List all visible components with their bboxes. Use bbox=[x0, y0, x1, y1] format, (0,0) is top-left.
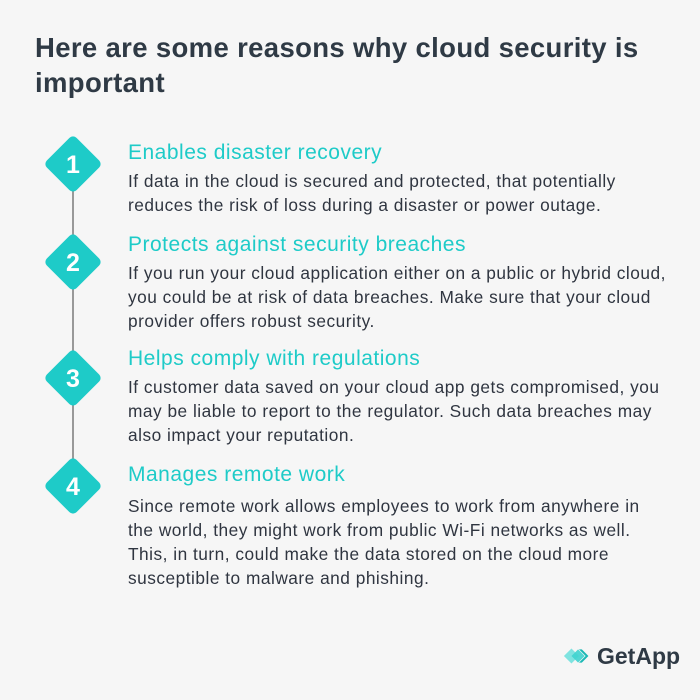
icon: diamond 1: 1 bbox=[66, 151, 80, 179]
section 2: provider offers robust security. bbox=[128, 311, 375, 331]
title bbox=[35, 32, 639, 98]
title: important bbox=[35, 67, 165, 98]
icon: diamond 4: 4 bbox=[66, 473, 80, 501]
section 3: Helps comply with regulations bbox=[128, 347, 420, 370]
section 4: susceptible to malware and phishing. bbox=[128, 568, 429, 588]
section 1 bbox=[128, 141, 616, 215]
section 2 bbox=[128, 233, 666, 331]
section 4: Since remote work allows employees to work from anywhere in bbox=[128, 496, 640, 516]
section 4: Manages remote work bbox=[128, 463, 345, 486]
section 1: If data in the cloud is secured and protected, that potentially bbox=[128, 171, 616, 191]
section 4: the world, they might work from public Wi-Fi networks as well. bbox=[128, 520, 631, 540]
icon: diamond 1 bbox=[45, 136, 101, 192]
icon: diamond 3: 3 bbox=[66, 365, 80, 393]
icon: diamond 4 bbox=[45, 458, 101, 514]
section 1: Enables disaster recovery bbox=[128, 141, 382, 164]
section 3 bbox=[128, 347, 659, 445]
icon: diamond 3 bbox=[45, 350, 101, 406]
icon: diamond 2: 2 bbox=[66, 249, 80, 277]
section 3: also impact your reputation. bbox=[128, 425, 354, 445]
section 1: reduces the risk of loss during a disaster or power outage. bbox=[128, 195, 601, 215]
logo: GetApp: GetApp bbox=[597, 643, 680, 669]
section 3: If customer data saved on your cloud app gets compromised, you bbox=[128, 377, 659, 397]
icon: diamond 2 bbox=[45, 234, 101, 290]
section 4: This, in turn, could make the data stored on the cloud more bbox=[128, 544, 609, 564]
section 2: Protects against security breaches bbox=[128, 233, 466, 256]
section 2: you could be at risk of data breaches. Make sure that your cloud bbox=[128, 287, 651, 307]
title: Here are some reasons why cloud security is bbox=[35, 32, 639, 63]
section 3: may be liable to report to the regulator. Such data breaches may bbox=[128, 401, 652, 421]
section 2: If you run your cloud application either on a public or hybrid cloud, bbox=[128, 263, 666, 283]
section 4 bbox=[128, 463, 640, 588]
